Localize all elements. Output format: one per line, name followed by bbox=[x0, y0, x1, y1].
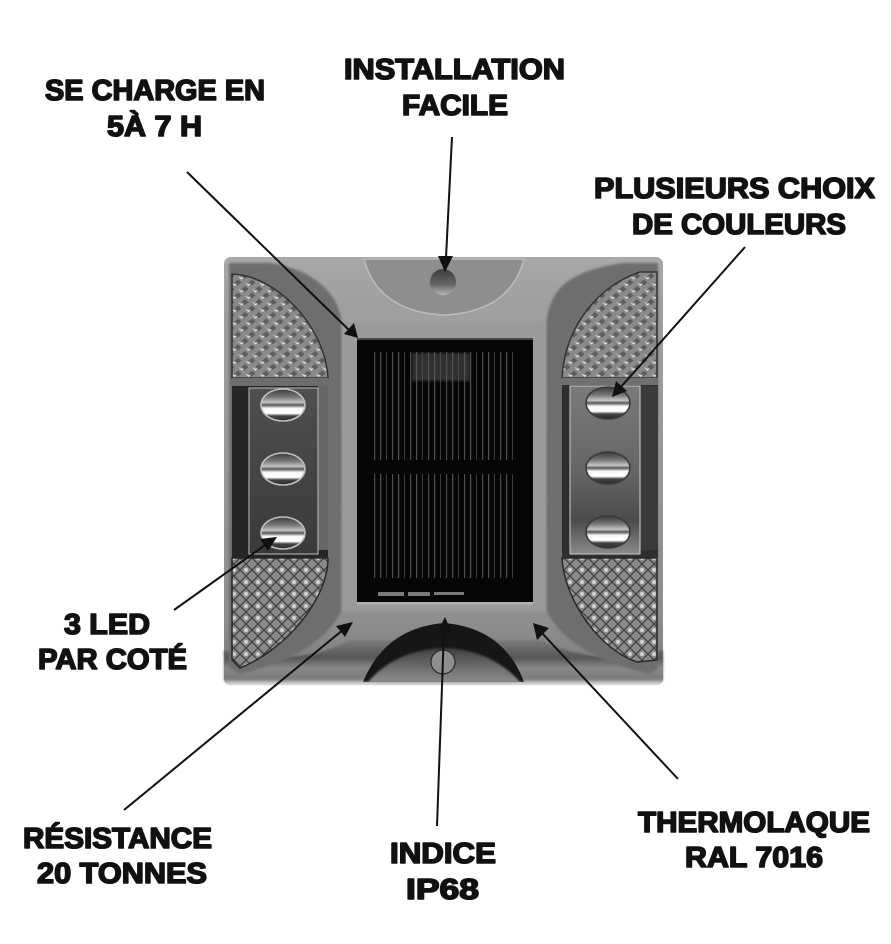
arrow: colours to right LED bbox=[612, 247, 745, 397]
label: installation facile: FACILE bbox=[402, 90, 508, 122]
label: installation facile bbox=[344, 54, 565, 122]
left top lens bbox=[232, 274, 328, 378]
top screw hole bbox=[430, 269, 456, 295]
label: indice IP68 bbox=[390, 838, 496, 906]
left bottom lens bbox=[232, 558, 328, 668]
left LED housing bbox=[232, 378, 328, 558]
label: se charge en 5 à 7 h: 5À 7 H bbox=[107, 109, 202, 143]
label: installation facile: INSTALLATION bbox=[344, 54, 565, 86]
label: résistance 20 tonnes bbox=[23, 821, 212, 890]
label: 3 LED par coté: PAR COTÉ bbox=[38, 642, 187, 676]
left dark channel bbox=[229, 263, 342, 674]
arrow: resistance to body bbox=[124, 622, 353, 810]
label: thermolaque RAL 7016: THERMOLAQUE bbox=[638, 807, 870, 839]
label: 3 LED par coté bbox=[38, 609, 187, 676]
label: résistance 20 tonnes: RÉSISTANCE bbox=[23, 821, 212, 855]
label: indice IP68: IP68 bbox=[406, 874, 479, 906]
arrow: coating to body bbox=[533, 623, 678, 779]
label: se charge en 5 à 7 h: SE CHARGE EN bbox=[45, 75, 265, 107]
right LED housing bbox=[562, 378, 658, 558]
arrow: IP rating to bottom recess bbox=[437, 617, 452, 826]
arrow: recharge to solar panel bbox=[187, 172, 358, 338]
right top lens bbox=[562, 272, 657, 378]
label: thermolaque RAL 7016 bbox=[638, 807, 870, 874]
label: plusieurs choix de couleurs bbox=[594, 173, 876, 241]
solar panel bbox=[357, 338, 533, 604]
label: se charge en 5 à 7 h bbox=[45, 75, 265, 143]
arrow: LEDs to left LED bbox=[174, 537, 277, 610]
central light frame bbox=[342, 322, 546, 612]
label: plusieurs choix de couleurs: DE COULEURS bbox=[632, 209, 846, 241]
product: solar road stud bbox=[222, 257, 665, 688]
label: plusieurs choix de couleurs: PLUSIEURS CHOIX bbox=[594, 173, 876, 205]
right bottom lens bbox=[562, 558, 657, 662]
label: thermolaque RAL 7016: RAL 7016 bbox=[685, 842, 823, 874]
bottom mounting recess bbox=[363, 623, 524, 682]
left LEDs bbox=[261, 389, 305, 549]
bottom front edge bbox=[224, 640, 663, 685]
bottom soft edge bbox=[222, 680, 665, 688]
bottom recess inner bbox=[368, 648, 520, 682]
bottom screw hole bbox=[431, 650, 455, 674]
stud body bbox=[224, 257, 663, 685]
label: 3 LED par coté: 3 LED bbox=[64, 609, 150, 641]
arrow: installation to top hole bbox=[438, 137, 453, 272]
right dark channel bbox=[546, 263, 658, 674]
top mounting recess bbox=[364, 259, 524, 315]
label: indice IP68: INDICE bbox=[390, 838, 496, 870]
right LEDs bbox=[586, 387, 630, 548]
label: résistance 20 tonnes: 20 TONNES bbox=[37, 858, 207, 890]
